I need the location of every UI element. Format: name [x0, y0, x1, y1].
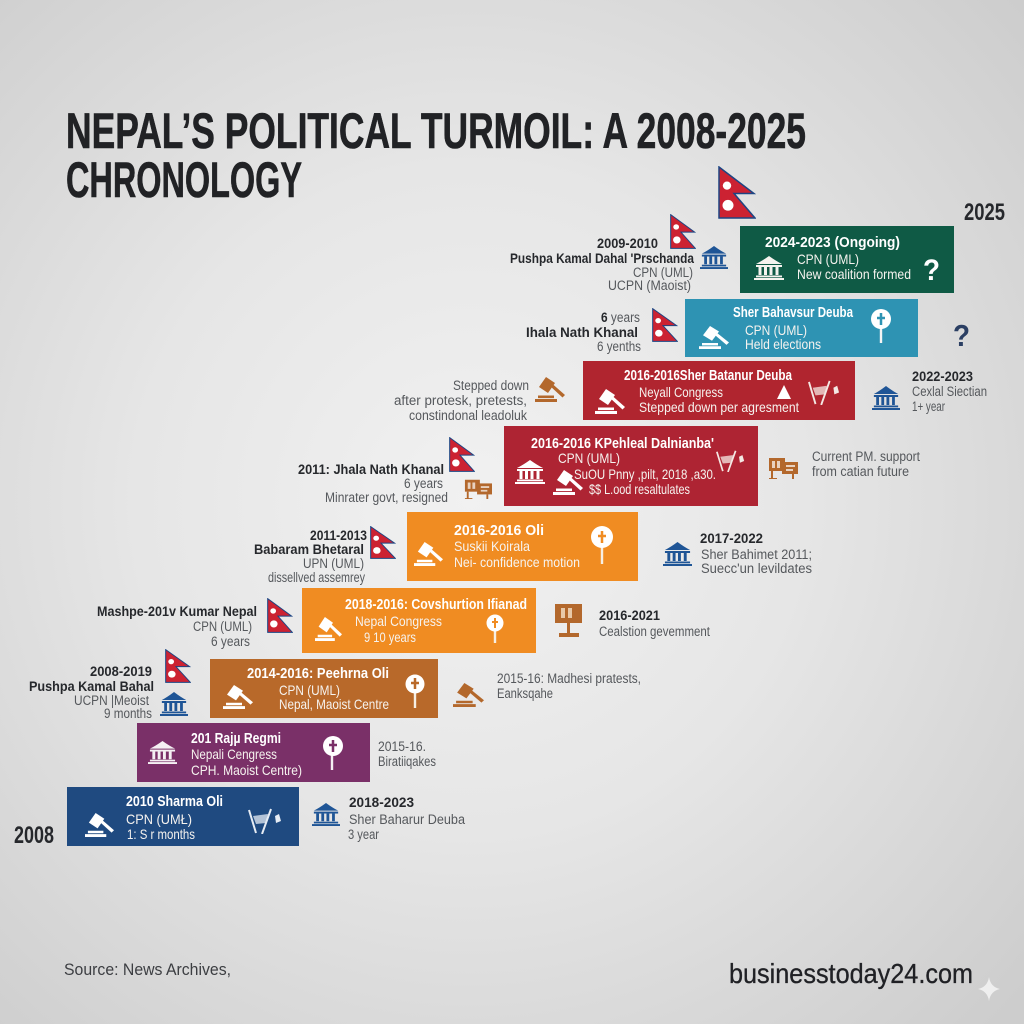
panel: 2024-2023 ongoing (green): ? [923, 254, 940, 287]
note: 2011 Jhala Nath Khanal [298, 461, 448, 505]
panel: Sher Bahadur Deuba (teal): Held elections [745, 336, 821, 352]
note: Madhav Kumar Nepal: Mashpe-201v Kumar Nepal [97, 603, 257, 619]
panel: Sher Bahadur Deuba (teal): CPN (UML) [745, 322, 807, 338]
panel: 2024-2023 ongoing (green): 2024-2023 (Ongoing) [765, 235, 900, 251]
panel: 2016 Oli (orange) [407, 512, 638, 581]
note: 2011-2013 Baburam Bhattarai: dissellved assemrey [268, 570, 365, 585]
note: 2018-2023 Sher Bahadur Deuba: 3 year [348, 827, 379, 842]
note: 2011 Jhala Nath Khanal: 6 years [404, 476, 443, 491]
panel: 2016 Sher Bahadur Deuba (red): 2016-2016Sher Batanur Deuba [624, 368, 793, 384]
source note: Source: News Archives, [64, 960, 231, 979]
note: 2022-2023 [912, 368, 987, 414]
icon: blue parliament 2009-2010 [700, 246, 728, 269]
icon: brown banner 2011 [465, 480, 492, 499]
note: 2015-16 earthquakes [378, 739, 436, 769]
panel: 2016 KP Dahal (dark red) [504, 426, 758, 506]
panel: Regmi (purple) [137, 723, 370, 782]
note: 2018-2023 Sher Bahadur Deuba: Sher Baharur Deuba [349, 812, 465, 827]
note: 2009-2010 Pushpa Kamal Dahal: UCPN (Maoist) [608, 278, 691, 293]
icon: brown gavel [535, 377, 565, 402]
year label 2025: 2025 [964, 199, 1005, 226]
icon: flag Khanal [653, 309, 677, 341]
icon: sparkle [978, 977, 1000, 1001]
panel: Regmi (purple): Nepali Cengress [191, 746, 277, 762]
panel: Sharma Oli (blue): CPN (UMŁ) [126, 811, 192, 827]
icon: flag 2011-2013 [371, 527, 395, 558]
panel: 2024-2023 ongoing (green): New coalition formed [797, 266, 911, 282]
icon: flag 2008 [166, 650, 190, 682]
note: 2009-2010 Pushpa Kamal Dahal [510, 235, 694, 293]
note: stepped down after protests: Stepped down [453, 378, 529, 393]
note: Ihala Nath Khanal [526, 310, 641, 354]
icon: blue parliament 2018-2023 [312, 803, 340, 826]
note: 2011-2013 Baburam Bhattarai: Babaram Bhetaral [254, 541, 364, 557]
panel: 2016 KP Dahal (dark red): 2016-2016 KPehleal Dalnianba' [531, 436, 714, 452]
note: 2008-2009 Pushpa Kamal Dahal [29, 663, 154, 721]
icon: brown banner current PM [769, 458, 798, 479]
note: Madhesi protests [497, 671, 641, 701]
panel: 2018-2016 constitution (orange): Nepal Congress [355, 613, 442, 629]
note: 2022-2023: 1+ year [912, 399, 945, 414]
note: 2022-2023: 2022-2023 [912, 368, 973, 384]
note: stepped down after protests: after protesk, pretests, [394, 393, 527, 408]
icon: brown gavel Madhesi [453, 683, 484, 707]
note: 2009-2010 Pushpa Kamal Dahal: 2009-2010 [597, 235, 658, 251]
panel: 2018-2016 constitution (orange): 9 10 years [364, 629, 416, 645]
panel: 2014-2016 Oli (brown) [210, 659, 438, 718]
panel: 2016 Oli (orange): 2016-2016 Oli [454, 523, 544, 539]
note: Madhav Kumar Nepal [97, 603, 257, 649]
panel: Sher Bahadur Deuba (teal): Sher Bahavsur Deuba [733, 305, 854, 321]
panel: 2014-2016 Oli (brown): CPN (UML) [279, 682, 340, 698]
panel: 2016 Oli (orange): Suskii Koirala [454, 538, 530, 554]
panel: 2016 Sher Bahadur Deuba (red): Stepped down per agresment [639, 399, 799, 415]
panel: 2024-2023 ongoing (green): CPN (UML) [797, 251, 859, 267]
icon: brown sign 2016-2021 [555, 604, 582, 637]
note: 2009-2010 Pushpa Kamal Dahal: Pushpa Kamal Dahal 'Prschanda [510, 250, 694, 266]
icon: flag 2009-2010 [671, 215, 695, 248]
panel: 2016 Oli (orange): Nei- confidence motion [454, 554, 580, 570]
note: 2015-16 earthquakes: Biratiiqakes [378, 754, 436, 769]
note: 2017-2022 [700, 530, 812, 576]
panel: Sharma Oli (blue) [67, 787, 299, 846]
note: 2008-2009 Pushpa Kamal Dahal: 9 months [104, 706, 152, 721]
note: current PM support: Current PM. support [812, 449, 920, 464]
panel: Sher Bahadur Deuba (teal) [685, 299, 918, 357]
icon: large Nepal flag at timeline end [719, 167, 755, 218]
note: Madhav Kumar Nepal: 6 years [211, 634, 250, 649]
title [66, 103, 806, 208]
note: 2011 Jhala Nath Khanal: Minrater govt, resigned [325, 490, 448, 505]
note: 2011-2013 Baburam Bhattarai: 2011-2013 [310, 527, 367, 543]
note: 2017-2022: 2017-2022 [700, 530, 763, 546]
panel: Sharma Oli (blue): 2010 Sharma Oli [126, 794, 223, 810]
panel: 2016 Sher Bahadur Deuba (red) [583, 361, 855, 420]
icon: blue parliament 2017-2022 [663, 542, 692, 566]
note: Ihala Nath Khanal: Ihala Nath Khanal [526, 324, 638, 340]
note: current PM support [812, 449, 920, 479]
panel: Sharma Oli (blue): 1: S r months [127, 826, 195, 842]
note: 2018-2023 Sher Bahadur Deuba [348, 794, 465, 842]
note: 2018-2023 Sher Bahadur Deuba: 2018-2023 [349, 794, 414, 810]
panel: 2016 KP Dahal (dark red): $$ L.ood resaltulates [589, 481, 690, 497]
panel: Regmi (purple): 201 Rajµ Regmi [191, 731, 281, 747]
icon: flag 2011 [450, 438, 474, 471]
note: 2011-2013 Baburam Bhattarai [254, 527, 367, 585]
icon: question mark: ? [953, 318, 970, 353]
note: 2008-2009 Pushpa Kamal Dahal: Pushpa Kamal Bahal [29, 678, 154, 694]
note: 2011 Jhala Nath Khanal: 2011: Jhala Nath Khanal [298, 461, 444, 477]
note: stepped down after protests [394, 378, 529, 423]
panel: 2018-2016 constitution (orange) [302, 588, 536, 653]
note: Madhesi protests: 2015-16: Madhesi pratests, [497, 671, 641, 686]
note: 2016-2021 [599, 607, 710, 639]
note: 2011-2013 Baburam Bhattarai: UPN (UML) [303, 556, 364, 571]
note: current PM support: from catian future [812, 464, 909, 479]
icon: blue parliament 2008 [160, 692, 188, 716]
icon: blue parliament 2022-2023 [872, 386, 900, 410]
note: Ihala Nath Khanal: 6 years [601, 310, 640, 325]
note: 2016-2021: 2016-2021 [599, 607, 660, 623]
note: 2015-16 earthquakes: 2015-16. [378, 739, 426, 754]
brand footer: businesstoday24.com [729, 958, 973, 989]
panel: 2016 Sher Bahadur Deuba (red): Neyall Congress [639, 384, 723, 400]
note: 2022-2023: Cexlal Siectian [912, 384, 987, 399]
note: 2008-2009 Pushpa Kamal Dahal: 2008-2019 [90, 663, 152, 679]
note: 2016-2021: Cealstion gevemment [599, 624, 710, 639]
panel: Regmi (purple): CPH. Maoist Centre) [191, 762, 302, 778]
note: 2017-2022: Sher Bahimet 2011; [701, 547, 812, 562]
note: stepped down after protests: constindonal leadoluk [409, 408, 527, 423]
note: Madhav Kumar Nepal: CPN (UML) [193, 619, 252, 634]
panel: 2016 KP Dahal (dark red): CPN (UML) [558, 450, 620, 466]
note: 2017-2022: Suecc'un levildates [701, 561, 812, 576]
note: 2009-2010 Pushpa Kamal Dahal: CPN (UML) [633, 265, 693, 280]
title: CHRONOLOGY [66, 152, 302, 208]
note: 2008-2009 Pushpa Kamal Dahal: UCPN |Meoist [74, 693, 149, 708]
panel: 2018-2016 constitution (orange): 2018-2016: Covshurtion Ifianad [345, 597, 527, 613]
note: Madhesi protests: Eanksqahe [497, 686, 553, 701]
panel: 2024-2023 ongoing (green) [740, 226, 954, 293]
note: Ihala Nath Khanal: 6 yenths [597, 339, 641, 354]
icon: flag Madhav Nepal [268, 599, 292, 632]
year label 2008: 2008 [14, 822, 54, 849]
panel: 2014-2016 Oli (brown): 2014-2016: Peehrna Oli [247, 666, 389, 682]
panel: 2014-2016 Oli (brown): Nepal, Maoist Centre [279, 696, 389, 712]
panel: 2016 KP Dahal (dark red): SuOU Pnny ,pilt, 2018 ,a30. [574, 466, 716, 482]
